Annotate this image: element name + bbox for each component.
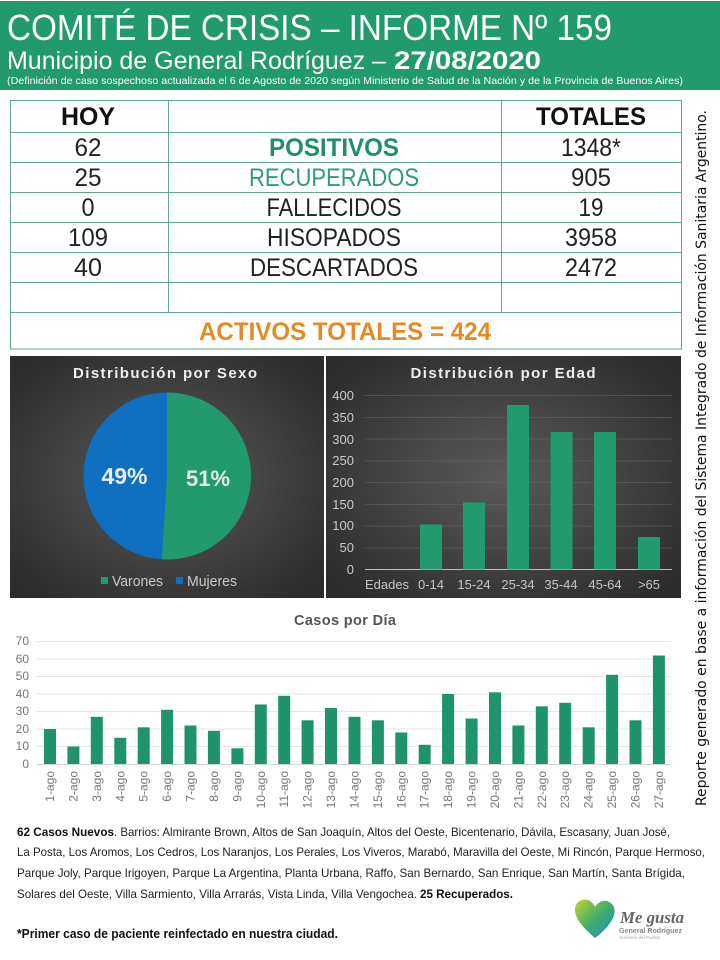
daily bars xyxy=(44,656,665,764)
date labels: 11-ago xyxy=(277,771,291,807)
barrios text block: 62 Casos Nuevos xyxy=(17,825,114,839)
row: hisopados: HISOPADOS xyxy=(267,224,401,252)
date labels: 10-ago xyxy=(254,771,268,808)
y axis labels: 250 xyxy=(332,453,354,468)
row: descartados: 40 xyxy=(74,254,102,282)
row: fallecidos: 0 xyxy=(82,194,94,222)
date labels: 19-ago xyxy=(465,771,479,808)
grid xyxy=(37,642,671,746)
y axis labels: 150 xyxy=(332,497,354,512)
y axis labels: 20 xyxy=(16,722,29,736)
row: fallecidos xyxy=(82,194,604,222)
x axis labels xyxy=(365,577,660,592)
date labels: 7-ago xyxy=(184,771,198,802)
y axis labels: 60 xyxy=(16,652,29,666)
bars xyxy=(420,405,660,570)
row: positivos: 62 xyxy=(74,134,102,162)
reinfection footnote: *Primer caso de paciente reinfectado en nuestra ciudad. xyxy=(17,927,338,941)
pie title: Distribución por Sexo xyxy=(73,365,257,382)
date labels: 18-ago xyxy=(441,771,455,808)
pie chart xyxy=(84,392,251,560)
logo: me gusta xyxy=(575,899,684,940)
barrios text block: Solares del Oeste, Villa Sarmiento, Villa Arrarás, Vista Linda, Villa Vengochea. xyxy=(17,887,417,901)
y axis labels: 100 xyxy=(332,518,354,533)
bar chart title: Distribución por Edad xyxy=(410,365,596,382)
panel: distribución por sexo xyxy=(10,356,324,598)
logo tagline: Gobierno del Pueblo xyxy=(619,935,661,940)
table header row xyxy=(61,103,646,131)
pie legend: Varones xyxy=(112,573,163,590)
row: hisopados xyxy=(68,224,617,252)
barrios text block: 25 Recuperados. xyxy=(420,887,513,901)
header band xyxy=(0,1,720,90)
date labels: 12-ago xyxy=(301,771,315,808)
vertical source note: Reporte generado en base a información del Sistema Integrado de Información Sanitaria Argentino. xyxy=(694,110,710,806)
age bar chart xyxy=(332,388,672,592)
label 49%: 49% xyxy=(101,463,148,489)
table header row: HOY xyxy=(61,103,115,131)
x axis labels: 45-64 xyxy=(588,577,622,592)
date labels: 23-ago xyxy=(558,771,572,808)
date labels: 15-ago xyxy=(371,771,385,808)
x axis labels: 15-24 xyxy=(457,577,491,592)
y axis labels: 200 xyxy=(332,475,354,490)
date labels: 1-ago xyxy=(43,771,57,802)
logo wordmark: Me gusta xyxy=(619,908,684,927)
date labels: 6-ago xyxy=(160,771,174,802)
barrios text block xyxy=(17,825,705,901)
y axis labels: 50 xyxy=(340,540,354,555)
row: hisopados: 3958 xyxy=(565,224,617,252)
x axis labels: >65 xyxy=(638,577,660,592)
icon: heart xyxy=(575,899,615,938)
date labels: 17-ago xyxy=(418,771,432,808)
chart: casos por día xyxy=(16,613,671,808)
row: positivos xyxy=(74,134,621,162)
date labels: 16-ago xyxy=(394,771,408,808)
y axis labels: 40 xyxy=(16,687,29,701)
definition note: (Definición de caso sospechoso actualizada el 6 de Agosto de 2020 según Ministerio de Salud de la Nación y de la Provincia de Buenos Aires) xyxy=(7,75,683,87)
y axis labels: 30 xyxy=(16,704,29,718)
subtitle: Municipio de General Rodríguez – xyxy=(7,47,386,75)
date labels: 3-ago xyxy=(90,771,104,802)
logo subtitle: General Rodríguez xyxy=(619,926,682,935)
panel: distribución por edad xyxy=(326,356,681,598)
row: positivos: 1348* xyxy=(561,134,621,162)
barrios text block: . Barrios: Almirante Brown, Altos de San Joaquín, Altos del Oeste, Bicentenario, Dávila, Escasany, Juan José, xyxy=(114,825,670,839)
row: hisopados: 109 xyxy=(68,224,108,252)
y axis labels: 400 xyxy=(332,388,354,403)
row: descartados: 2472 xyxy=(565,254,617,282)
y axis labels: 0 xyxy=(22,757,29,771)
summary table xyxy=(10,100,682,349)
daily chart title: Casos por Día xyxy=(294,613,397,629)
y axis labels: 70 xyxy=(16,634,29,648)
label 51%: 51% xyxy=(186,466,230,491)
date labels: 2-ago xyxy=(66,771,80,802)
date labels: 21-ago xyxy=(511,771,525,808)
date labels: 5-ago xyxy=(137,771,151,802)
row: recuperados: 905 xyxy=(571,164,611,192)
report date: 27/08/2020 xyxy=(394,47,541,75)
y axis labels: 10 xyxy=(16,739,29,753)
date labels: 22-ago xyxy=(535,771,549,808)
table header row: TOTALES xyxy=(536,103,646,131)
date labels: 26-ago xyxy=(628,771,642,808)
row: fallecidos: 19 xyxy=(578,194,604,222)
y axis labels: 300 xyxy=(332,432,354,447)
date labels xyxy=(43,771,666,808)
date labels: 14-ago xyxy=(348,771,362,808)
date labels: 27-ago xyxy=(652,771,666,808)
date labels: 24-ago xyxy=(582,771,596,808)
x axis labels: 0-14 xyxy=(418,577,444,592)
row: recuperados: RECUPERADOS xyxy=(249,164,419,192)
row: recuperados xyxy=(74,164,611,192)
pie legend: Mujeres xyxy=(187,573,237,590)
activos totales: ACTIVOS TOTALES = 424 xyxy=(199,318,491,346)
row: fallecidos: FALLECIDOS xyxy=(266,194,402,222)
date labels: 8-ago xyxy=(207,771,221,802)
x axis labels: Edades xyxy=(365,577,410,592)
row: descartados xyxy=(74,254,617,282)
date labels: 25-ago xyxy=(605,771,619,808)
barrios text block: Parque Joly, Parque Irigoyen, Parque La Argentina, Planta Urbana, Raffo, San Bernardo, San Enrique, San Martín, Santa Brígida, xyxy=(17,866,685,880)
row: descartados: DESCARTADOS xyxy=(250,254,418,282)
date labels: 9-ago xyxy=(230,771,244,802)
date labels: 4-ago xyxy=(113,771,127,802)
y axis labels xyxy=(16,634,29,771)
barrios text block: La Posta, Los Aromos, Los Cedros, Los Naranjos, Los Perales, Los Viveros, Marabó, Maravilla del Oeste, Mi Rincón, Parque Hermoso, xyxy=(17,845,705,859)
title: COMITÉ DE CRISIS – INFORME Nº 159 xyxy=(7,7,612,48)
date labels: 20-ago xyxy=(488,771,502,808)
pie legend xyxy=(101,573,237,590)
x axis labels: 25-34 xyxy=(501,577,535,592)
x axis labels: 35-44 xyxy=(544,577,578,592)
row: positivos: POSITIVOS xyxy=(269,134,399,162)
y axis labels: 50 xyxy=(16,669,29,683)
y axis labels: 0 xyxy=(347,562,354,577)
y axis labels: 350 xyxy=(332,410,354,425)
date labels: 13-ago xyxy=(324,771,338,808)
row: recuperados: 25 xyxy=(74,164,102,192)
y axis labels xyxy=(332,388,354,577)
